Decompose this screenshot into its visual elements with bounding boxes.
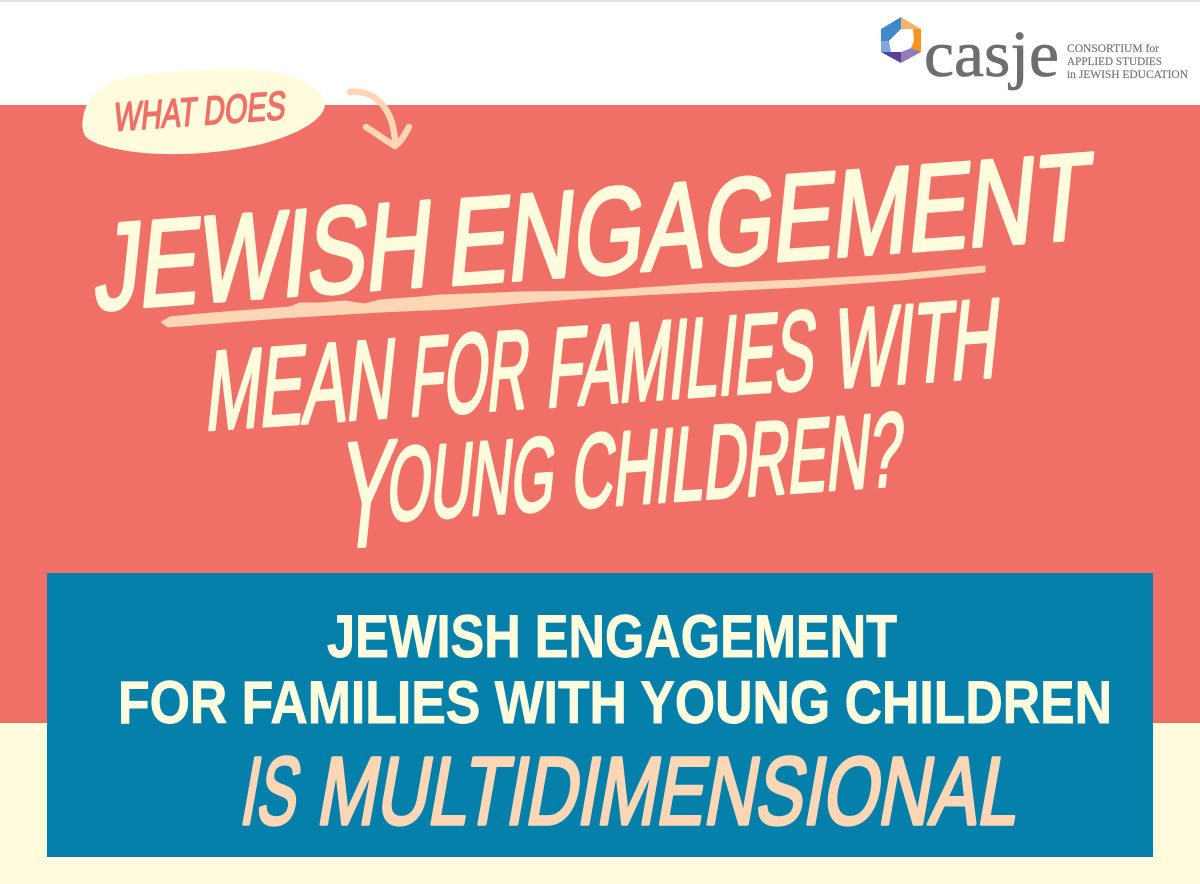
title: jewish engagement xyxy=(90,128,1097,337)
panel: cream footer band xyxy=(0,723,1200,884)
title: mean for families with: WITH xyxy=(829,274,1006,412)
title: young children: CHILDREN? xyxy=(568,391,909,531)
logo tagline: CONSORTIUM for xyxy=(1067,43,1159,55)
cream blob xyxy=(82,70,325,154)
title: mean for families with: FOR xyxy=(405,306,536,440)
logo tagline: APPLIED STUDIES xyxy=(1067,56,1162,68)
logo wordmark: casje xyxy=(924,18,1059,91)
title: young children: OUNG xyxy=(383,415,562,544)
callout: what does xyxy=(82,70,325,154)
panel: coral background xyxy=(0,105,1200,723)
arrow: pointing to title xyxy=(350,92,409,146)
title: young children xyxy=(333,391,909,581)
underline stroke xyxy=(161,266,985,327)
title: mean for families with: FAMILIES xyxy=(542,286,823,431)
logo: CASJE xyxy=(881,17,1189,91)
title: jewish engagement: JEWISH xyxy=(90,175,439,337)
icon: hexagon logo mark xyxy=(881,17,921,63)
title: young children: Y xyxy=(333,408,402,581)
heading emphasis: is multidimensional: IS xyxy=(234,737,309,845)
title: mean for families with: MEAN xyxy=(201,315,402,454)
title: mean for families with xyxy=(201,274,1006,454)
logo tagline: in JEWISH EDUCATION xyxy=(1067,69,1189,81)
panel: blue statement box xyxy=(47,573,1153,857)
heading line one: JEWISH ENGAGEMENT xyxy=(327,603,897,670)
logo tagline xyxy=(1067,43,1189,81)
callout text: WHAT DOES xyxy=(112,83,288,140)
